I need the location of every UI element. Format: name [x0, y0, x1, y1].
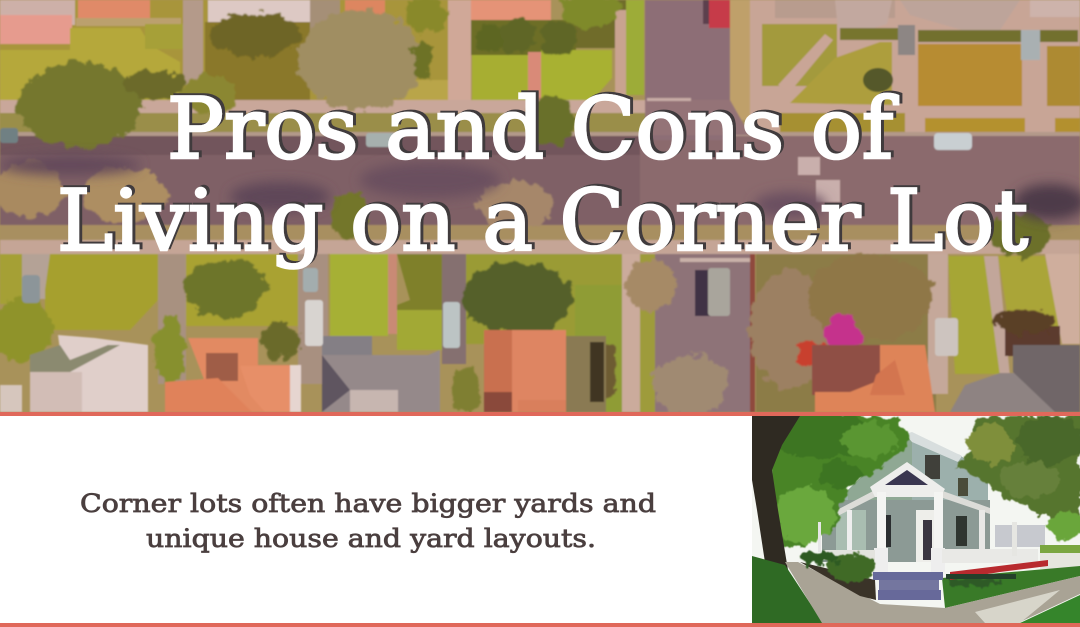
cars	[22, 275, 40, 303]
intro text: Corner lots often have bigger yards and	[80, 489, 656, 518]
lawns	[752, 556, 823, 623]
porch gable	[870, 462, 945, 497]
upper siding	[844, 442, 988, 500]
intro text: unique house and yard layouts.	[146, 524, 596, 553]
porch columns	[877, 497, 886, 548]
spanish roof house	[812, 345, 884, 395]
white car on road	[934, 133, 972, 150]
right tree canopy	[955, 416, 1080, 530]
left tree canopy	[765, 411, 1080, 550]
right of road lower	[756, 254, 936, 412]
shadows on road	[0, 155, 1080, 220]
intro text	[80, 489, 656, 553]
top-right blocks	[730, 0, 750, 120]
top salmon divider band	[0, 412, 1080, 416]
flower bed	[950, 560, 1048, 580]
vertical road bottom	[655, 254, 755, 412]
grey house right	[950, 372, 1054, 412]
title: Pros and Cons of	[167, 80, 899, 178]
tree trunk	[752, 416, 800, 582]
title: Living on a Corner Lot	[57, 172, 1028, 270]
lower lawns row	[0, 254, 22, 304]
vertical road top	[645, 0, 730, 140]
trees	[0, 0, 1055, 415]
doorway and windows	[916, 510, 936, 562]
background house and fence	[995, 525, 1045, 547]
lower strips under road	[330, 227, 1052, 238]
bushes	[800, 550, 1001, 587]
horizontal road	[0, 154, 640, 226]
sidewalk	[785, 562, 1080, 623]
porch steps	[873, 572, 943, 600]
soil bed	[800, 562, 876, 600]
top-left blocks	[0, 0, 450, 100]
photo of corner house	[752, 411, 1080, 623]
houses bottom	[57, 334, 149, 412]
bottom salmon divider band	[0, 623, 1080, 627]
title	[57, 80, 1028, 270]
aerial photo of neighborhood	[0, 0, 1080, 415]
porch railings	[823, 550, 875, 560]
ground-floor wall	[822, 500, 990, 562]
horizontal sidewalk top	[0, 100, 645, 113]
road paint	[798, 157, 820, 175]
